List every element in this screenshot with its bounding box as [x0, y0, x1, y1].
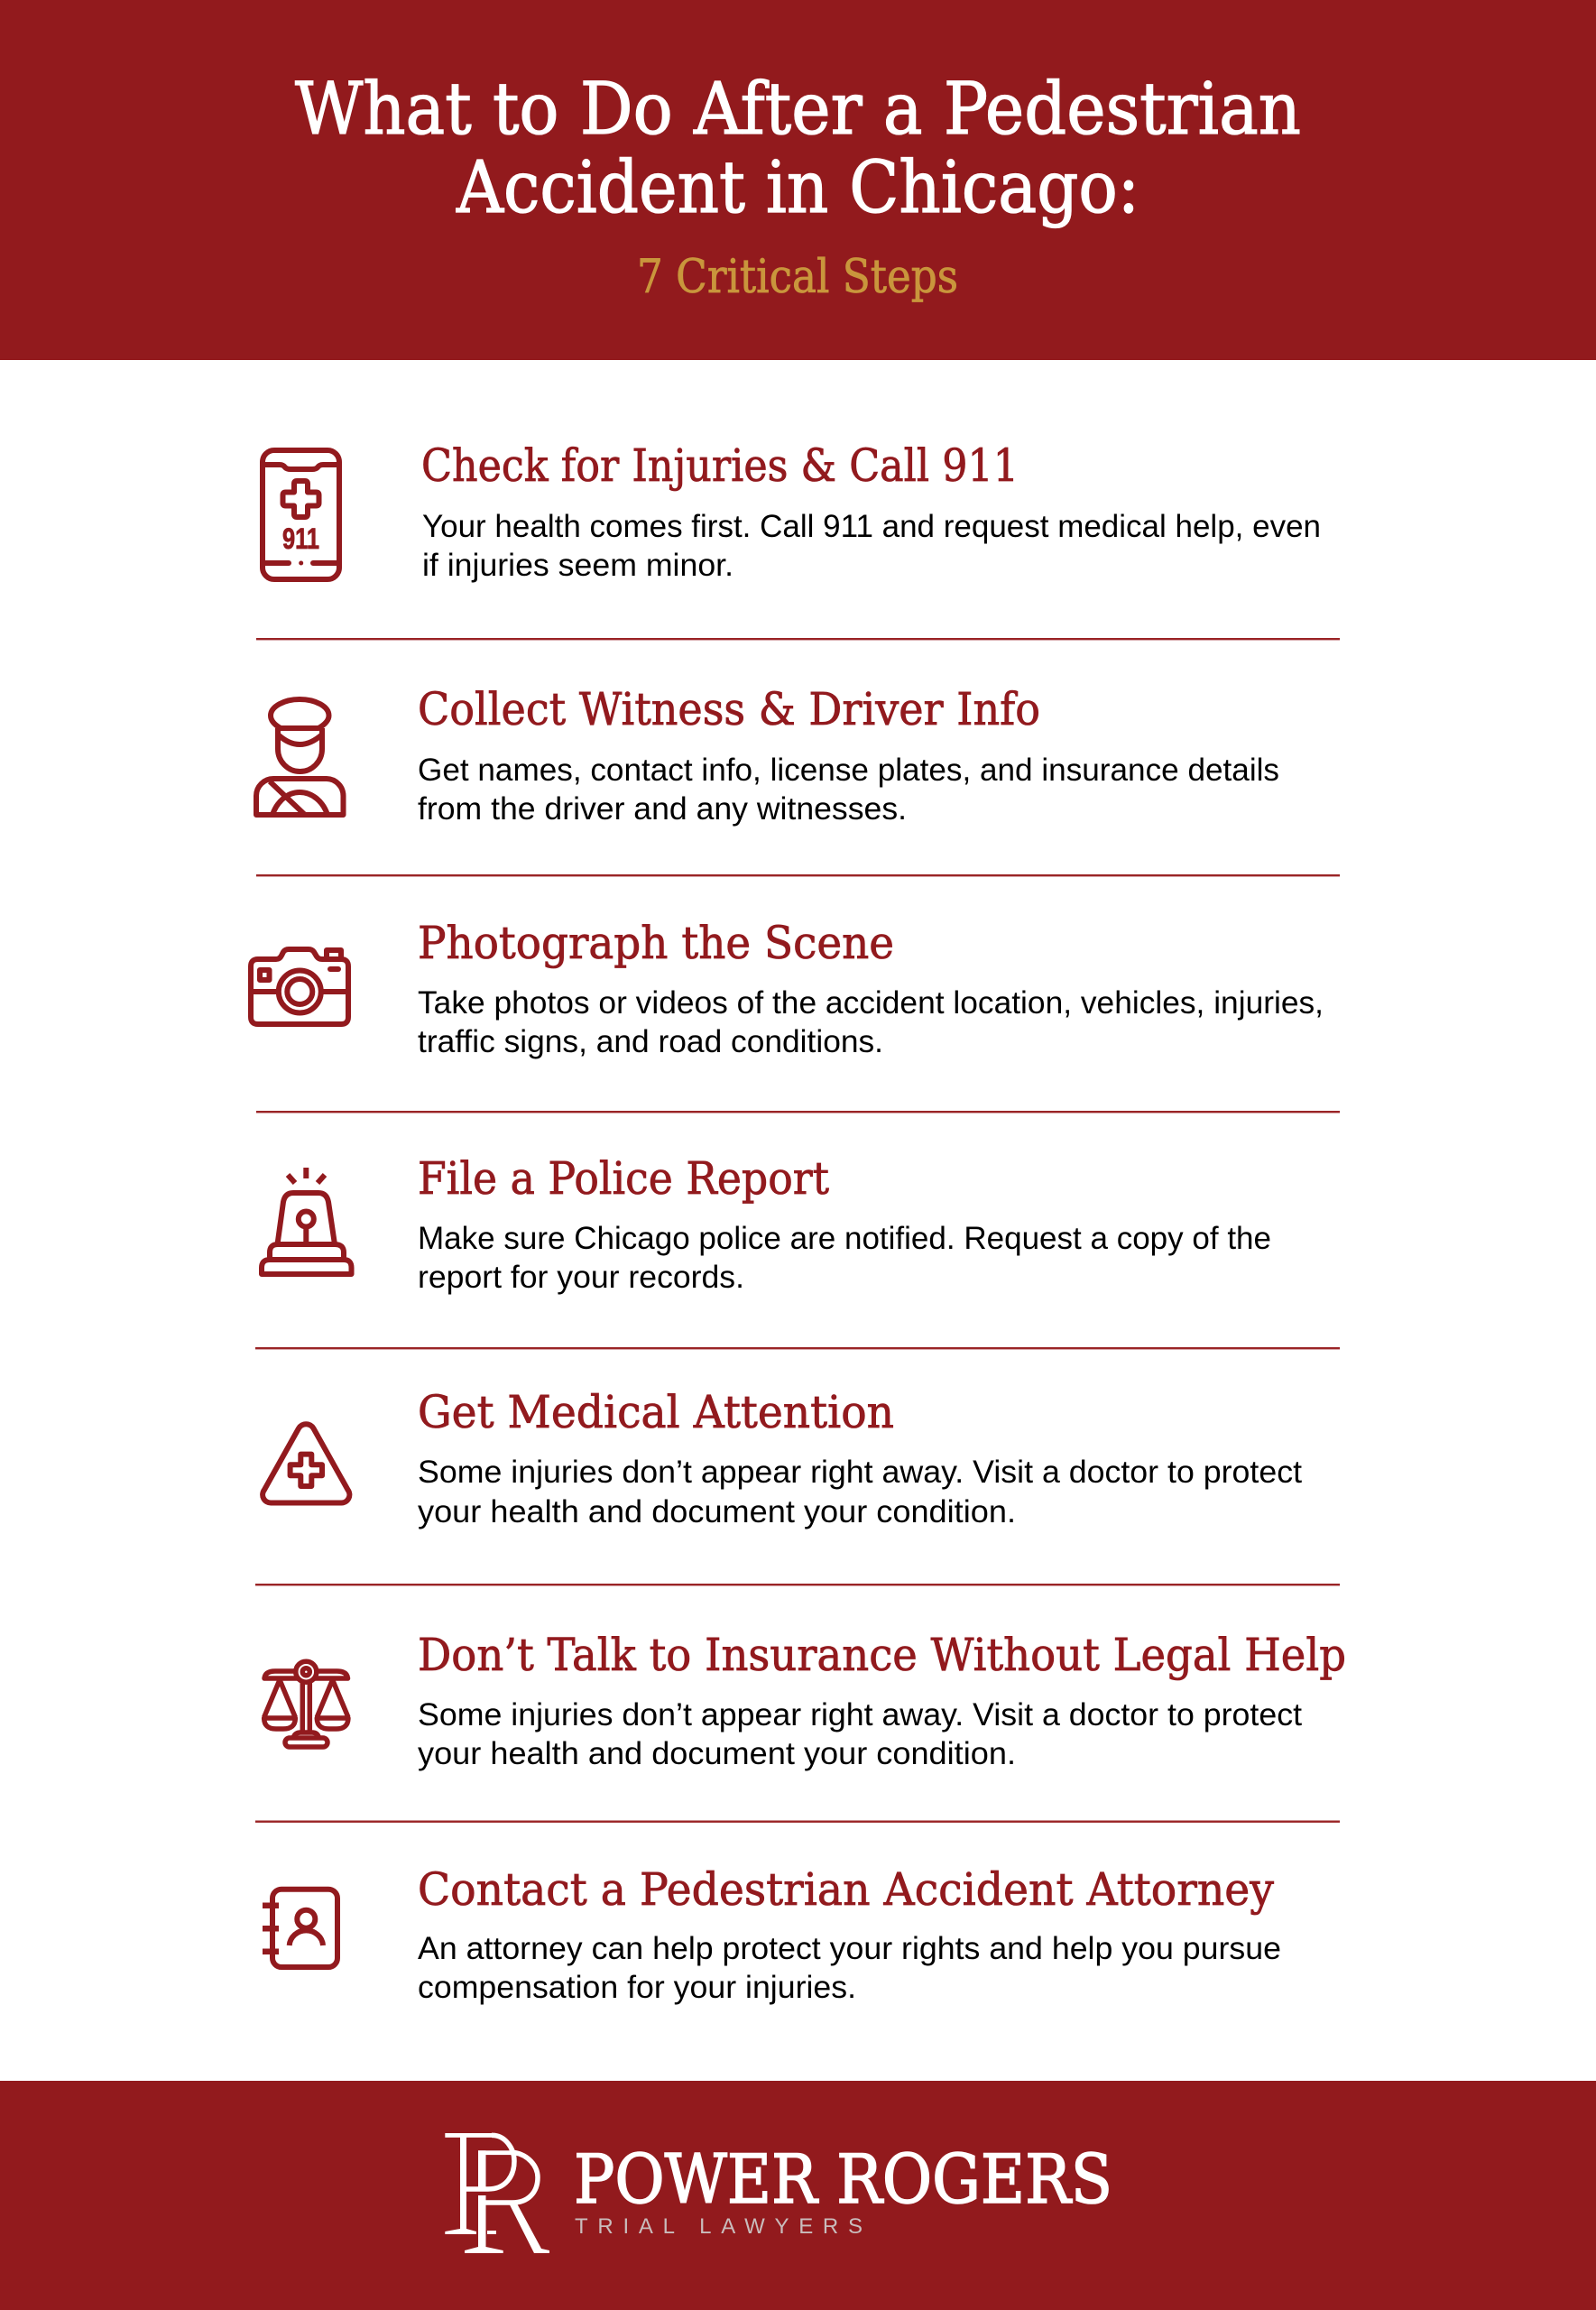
panel: step 6 — [264, 1629, 1346, 1771]
logo wordmark: POWER ROGERS — [574, 2139, 1112, 2219]
icon: police siren — [262, 1168, 352, 1274]
icon: address book with person — [263, 1890, 337, 1967]
heading: step 7: Contact a Pedestrian Accident Attorney — [418, 1863, 1275, 1916]
panel: step 4 — [262, 1152, 1271, 1295]
logo: PR monogram — [445, 2133, 549, 2253]
panel: footer — [0, 2081, 1596, 2310]
title — [295, 67, 1301, 229]
text: step 1 — [422, 509, 1321, 583]
text: step 5: your health and document your condition. — [418, 1494, 1016, 1529]
title: Accident in Chicago: — [456, 145, 1139, 229]
text: step 7: compensation for your injuries. — [418, 1970, 856, 2005]
text: step 1: if injuries seem minor. — [422, 548, 733, 583]
text: step 2: from the driver and any witnesses. — [418, 791, 907, 827]
heading: step 2: Collect Witness & Driver Info — [418, 683, 1040, 735]
text: step 7 — [418, 1931, 1281, 2005]
text: step 7: An attorney can help protect your rights and help you pursue — [418, 1931, 1281, 1966]
panel: step 7 — [263, 1863, 1281, 2005]
heading: step 5: Get Medical Attention — [418, 1386, 894, 1438]
text: step 1: Your health comes first. Call 911 and request medical help, even — [422, 509, 1321, 544]
subtitle: 7 Critical Steps — [637, 251, 958, 304]
title: What to Do After a Pedestrian — [295, 67, 1301, 151]
text: step 4 — [418, 1221, 1271, 1295]
panel: step 3 — [251, 917, 1324, 1059]
text: step 3: Take photos or videos of the accident location, vehicles, injuries, — [418, 985, 1324, 1021]
logo tagline: TRIAL LAWYERS — [575, 2214, 863, 2239]
text: step 3: traffic signs, and road conditions. — [418, 1024, 883, 1059]
heading: step 3: Photograph the Scene — [418, 917, 894, 969]
text: step 5 — [418, 1455, 1302, 1529]
heading: step 4: File a Police Report — [418, 1152, 829, 1205]
panel: step 1 — [263, 439, 1321, 583]
panel: step 2 — [256, 683, 1279, 827]
text: step 6: your health and document your condition. — [418, 1736, 1016, 1771]
text: step 2 — [418, 753, 1279, 827]
panel: header — [0, 0, 1596, 360]
heading: step 1: Check for Injuries & Call 911 — [421, 439, 1019, 492]
text: step 6 — [418, 1697, 1302, 1771]
icon: phone with 911: 911 — [282, 522, 319, 555]
text: step 6: Some injuries don’t appear right away. Visit a doctor to protect — [418, 1697, 1302, 1732]
icon: camera — [251, 949, 348, 1024]
text: step 4: report for your records. — [418, 1260, 744, 1295]
text: step 4: Make sure Chicago police are notified. Request a copy of the — [418, 1221, 1271, 1256]
text: step 2: Get names, contact info, license plates, and insurance details — [418, 753, 1279, 788]
text: step 3 — [418, 985, 1324, 1059]
icon: driver — [256, 699, 343, 815]
icon: phone with 911 — [263, 450, 339, 579]
heading: step 6: Don’t Talk to Insurance Without Legal Help — [418, 1629, 1346, 1681]
icon: scales of justice — [264, 1661, 348, 1747]
icon: warning triangle with cross — [263, 1424, 349, 1503]
text: step 5: Some injuries don’t appear right away. Visit a doctor to protect — [418, 1455, 1302, 1490]
panel: step 5 — [263, 1386, 1302, 1529]
